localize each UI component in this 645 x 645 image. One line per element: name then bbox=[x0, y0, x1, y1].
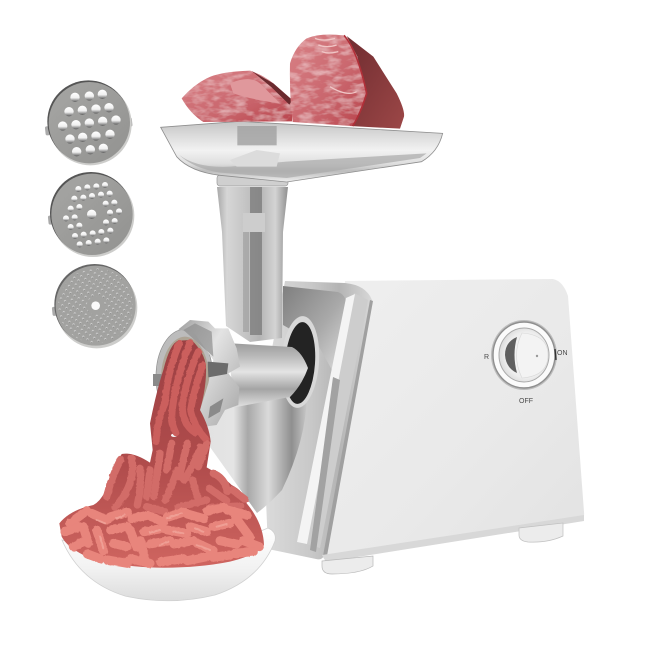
collar ring bbox=[278, 315, 322, 409]
raw meat pieces bbox=[182, 34, 404, 129]
left meat bbox=[182, 71, 292, 122]
falling strands bbox=[156, 343, 206, 442]
upper tier strands bbox=[107, 443, 245, 512]
right meat bbox=[290, 34, 404, 129]
plate: large holes bbox=[45, 80, 133, 165]
label ON: ON bbox=[557, 350, 568, 357]
meat strands bbox=[65, 343, 259, 563]
cutting plates bbox=[45, 80, 137, 348]
nut lugs bbox=[178, 320, 240, 427]
tray rim and bowl bbox=[161, 121, 443, 182]
food tray bbox=[161, 121, 443, 182]
bottom edge bbox=[322, 515, 584, 562]
locking nut bbox=[153, 320, 240, 427]
housing front face bbox=[322, 279, 584, 561]
housing chrome side bbox=[262, 281, 372, 559]
lower tier strands bbox=[65, 507, 259, 563]
knob dial bbox=[505, 337, 517, 373]
foot: rear bbox=[519, 523, 563, 542]
machine housing bbox=[262, 279, 584, 574]
control knob bbox=[484, 320, 568, 405]
shoulder reflection bbox=[283, 286, 346, 370]
meat mound bbox=[59, 340, 264, 568]
knob ring bbox=[491, 320, 557, 390]
funnel under head bbox=[205, 395, 307, 513]
plate: medium holes bbox=[48, 172, 134, 257]
foot: front bbox=[322, 556, 373, 574]
serving bowl bbox=[62, 528, 275, 601]
ground meat bbox=[59, 340, 264, 568]
grinder column bbox=[217, 175, 288, 342]
horizontal tube bbox=[226, 343, 308, 407]
gap under falling meat bbox=[171, 434, 177, 437]
nut ring bbox=[156, 329, 213, 424]
plate: fine holes bbox=[52, 264, 137, 348]
label OFF: OFF bbox=[519, 398, 533, 405]
label R: R bbox=[484, 354, 489, 361]
strand highlights bbox=[97, 513, 227, 550]
